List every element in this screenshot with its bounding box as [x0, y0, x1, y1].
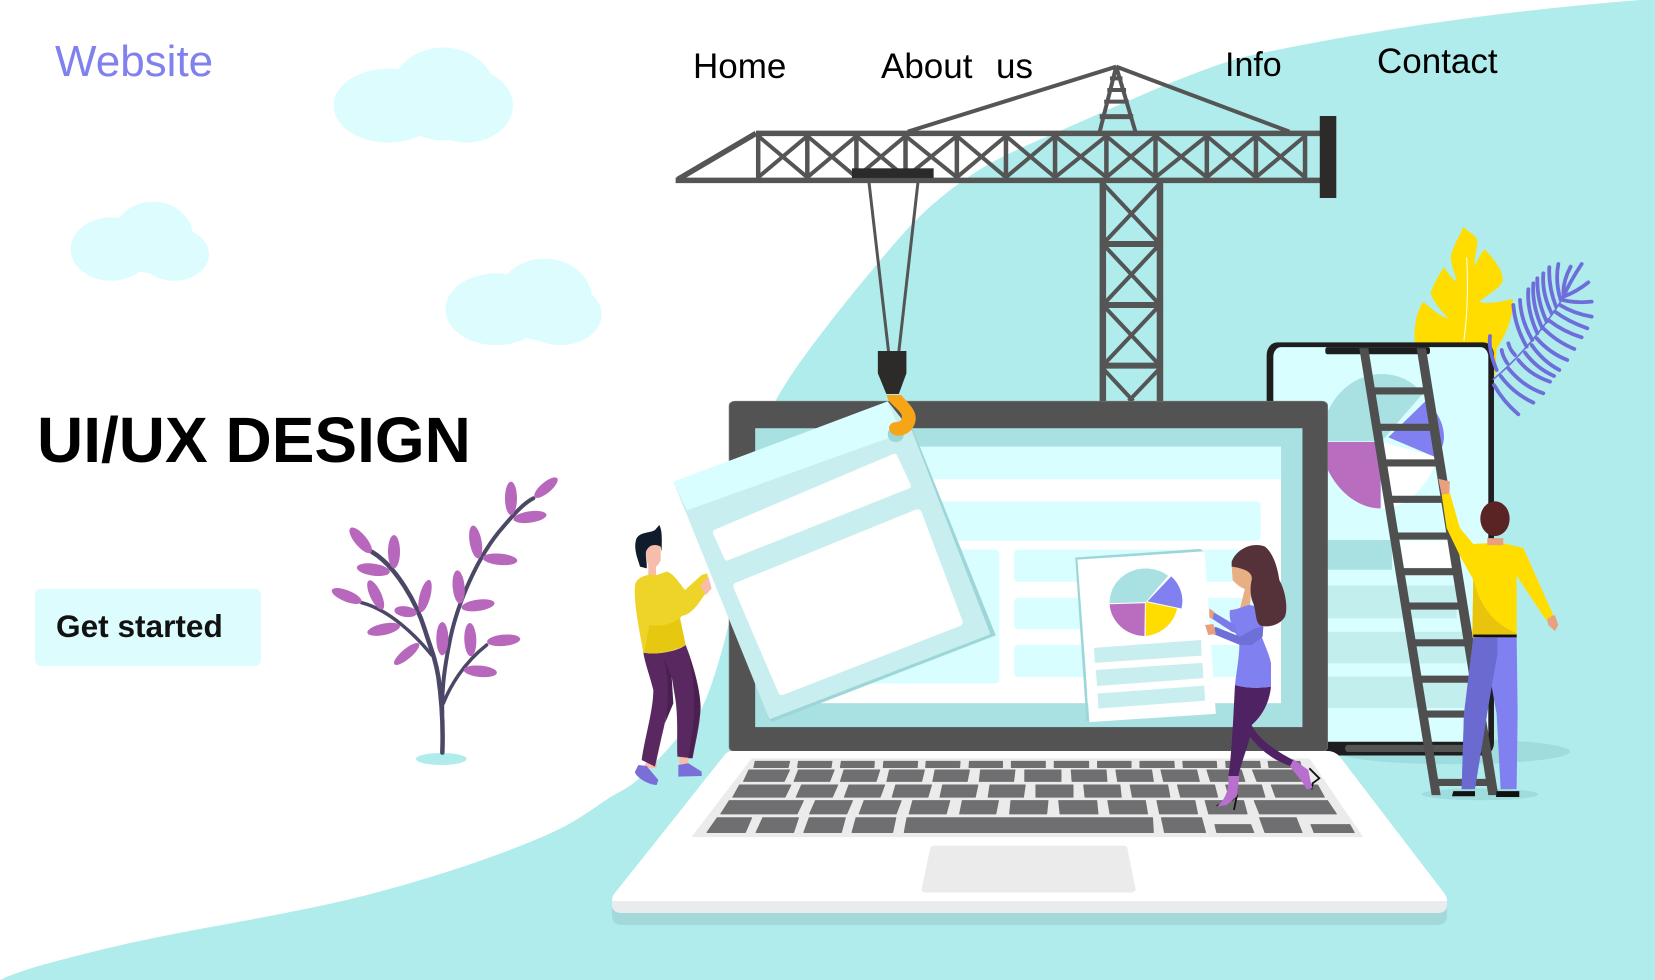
clouds — [71, 47, 602, 345]
yellow leaf — [1415, 227, 1513, 376]
button: Get started — [35, 589, 261, 666]
nav: About us: About — [881, 47, 973, 86]
trackpad — [922, 846, 1136, 892]
phone shadow — [1337, 739, 1570, 800]
plant — [330, 474, 561, 765]
crane — [676, 67, 1336, 402]
laptop shadow — [612, 900, 1447, 925]
laptop base — [612, 751, 1447, 913]
man with window card — [635, 525, 712, 785]
crane hook — [887, 395, 916, 436]
laptop screen — [729, 401, 1327, 751]
hanging window card — [673, 401, 996, 722]
phone — [1267, 342, 1494, 756]
laptop deck — [612, 751, 1447, 901]
chart document — [1075, 549, 1216, 722]
palm leaf — [1490, 264, 1592, 414]
man on ladder — [1438, 479, 1558, 797]
pie chart — [1110, 568, 1182, 636]
logo: Website: Website — [55, 37, 213, 86]
keyboard — [691, 759, 1363, 892]
nav: Info: Info — [1225, 46, 1282, 84]
heading: UI/UX DESIGN — [37, 404, 471, 476]
laptop — [612, 401, 1447, 925]
woman — [1205, 545, 1319, 810]
nav: About us: us — [996, 47, 1033, 86]
button: Get started: Get started — [56, 608, 223, 644]
nav: Home: Home — [693, 47, 786, 86]
nav: Contact: Contact — [1377, 42, 1498, 81]
ladder — [1359, 348, 1498, 795]
